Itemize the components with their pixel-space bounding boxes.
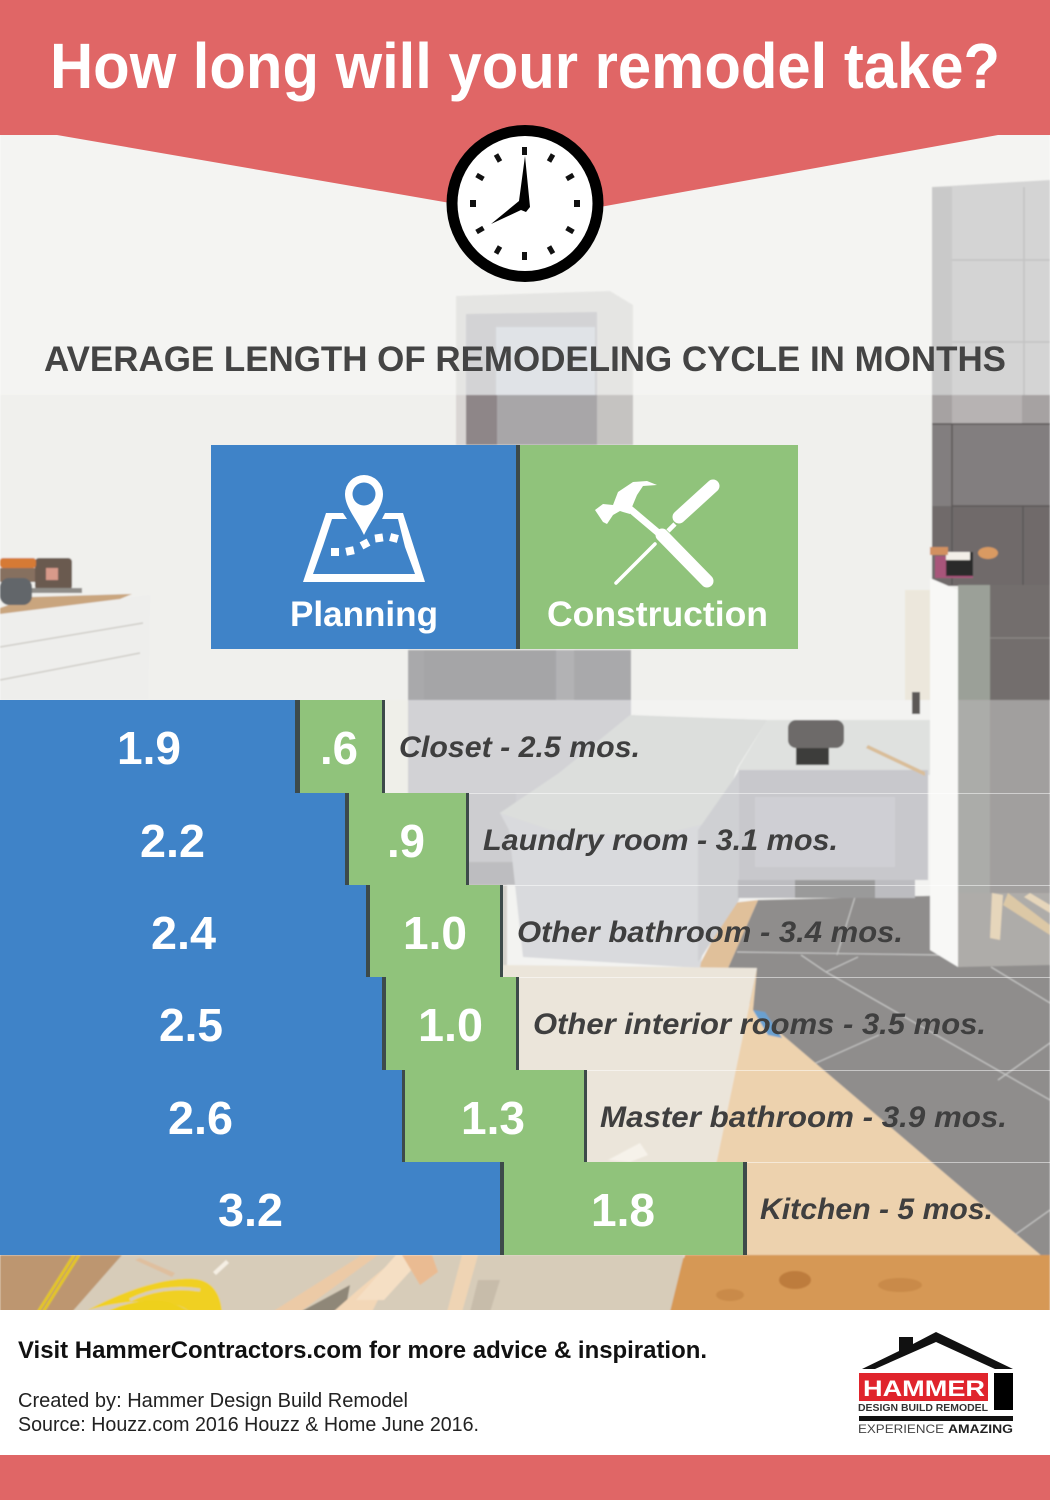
- logo: Hammer Design Build Remodel: DESIGN BUILD REMODEL: [858, 1403, 988, 1414]
- icon: hammer and screwdriver: [595, 481, 713, 583]
- logo: Hammer Design Build Remodel: EXPERIENCE: [858, 1424, 944, 1436]
- bar row: master bathroom: Master bathroom - 3.9 mos.: [600, 1101, 1007, 1134]
- drywall sheet: [503, 965, 757, 1258]
- legend: construction: [520, 445, 798, 649]
- bar row: kitchen: 3.2: [218, 1184, 283, 1236]
- logo: Hammer Design Build Remodel: [858, 1332, 1013, 1436]
- bar row: master bathroom: 1.3: [461, 1092, 525, 1144]
- logo: Hammer Design Build Remodel: HAMMER: [863, 1376, 985, 1401]
- header banner: [0, 0, 1050, 207]
- tub and cabinet: [500, 715, 930, 968]
- panel: legend: [211, 445, 798, 649]
- credits: Created by: Hammer Design Build Remodel: [18, 1390, 408, 1412]
- white pillar: [905, 578, 958, 967]
- centre column and doorway: [385, 291, 633, 970]
- bar row: laundry room: [0, 793, 838, 885]
- plywood floor: [668, 968, 1050, 1312]
- bar row: laundry room: .9: [387, 815, 425, 867]
- bar row: master bathroom: [0, 1070, 1007, 1162]
- bar row: other bathroom: [0, 885, 903, 977]
- icon: clock: [446, 125, 604, 282]
- left cabinet and power tool: [0, 558, 150, 700]
- credits: [18, 1390, 479, 1436]
- bar row: other bathroom: 1.0: [403, 907, 467, 959]
- bar row: other interior rooms: 1.0: [418, 999, 483, 1051]
- bar row: closet: Closet - 2.5 mos.: [399, 731, 640, 764]
- background photo: bathroom under renovation: [0, 130, 1050, 1312]
- bar row: other interior rooms: Other interior rooms - 3.5 mos.: [533, 1008, 986, 1041]
- bar row: closet: [0, 700, 640, 793]
- bottom band: [0, 1455, 1050, 1500]
- call to action: Visit HammerContractors.com for more advice & inspiration.: [18, 1337, 707, 1364]
- bar row: other bathroom: Other bathroom - 3.4 mos.: [517, 916, 903, 949]
- panel: footer: [0, 1310, 1050, 1455]
- label: construction: Construction: [547, 595, 768, 634]
- title: How long will your remodel take?: [50, 30, 1000, 102]
- bar row: laundry room: 2.2: [140, 815, 205, 867]
- bar row: kitchen: Kitchen - 5 mos.: [760, 1193, 993, 1226]
- chart: planning vs construction months by room: [0, 700, 1007, 1255]
- legend: planning: [211, 445, 516, 649]
- subtitle: AVERAGE LENGTH OF REMODELING CYCLE IN MONTHS: [44, 340, 1006, 379]
- bar row: other bathroom: 2.4: [151, 907, 216, 959]
- toolbox item on pillar: [930, 547, 998, 578]
- credits: Source: Houzz.com 2016 Houzz & Home June 2016.: [18, 1414, 479, 1436]
- logo: Hammer Design Build Remodel: AMAZING: [948, 1424, 1013, 1436]
- right tile wall: [932, 180, 1050, 900]
- bar row: other interior rooms: [0, 977, 986, 1070]
- label: planning: Planning: [290, 595, 438, 634]
- bar row: closet: .6: [320, 722, 358, 774]
- slate floor: [698, 893, 1050, 1258]
- icon: map with location pin: [303, 475, 425, 582]
- bar row: laundry room: Laundry room - 3.1 mos.: [483, 824, 838, 857]
- bar row: closet: 1.9: [117, 722, 181, 774]
- bar row: kitchen: 1.8: [591, 1184, 655, 1236]
- bar row: other interior rooms: 2.5: [159, 999, 223, 1051]
- bar row: master bathroom: 2.6: [168, 1092, 233, 1144]
- bottom debris: wood, drywall and yellow cable: [0, 1255, 684, 1312]
- bar row: kitchen: [0, 1162, 993, 1255]
